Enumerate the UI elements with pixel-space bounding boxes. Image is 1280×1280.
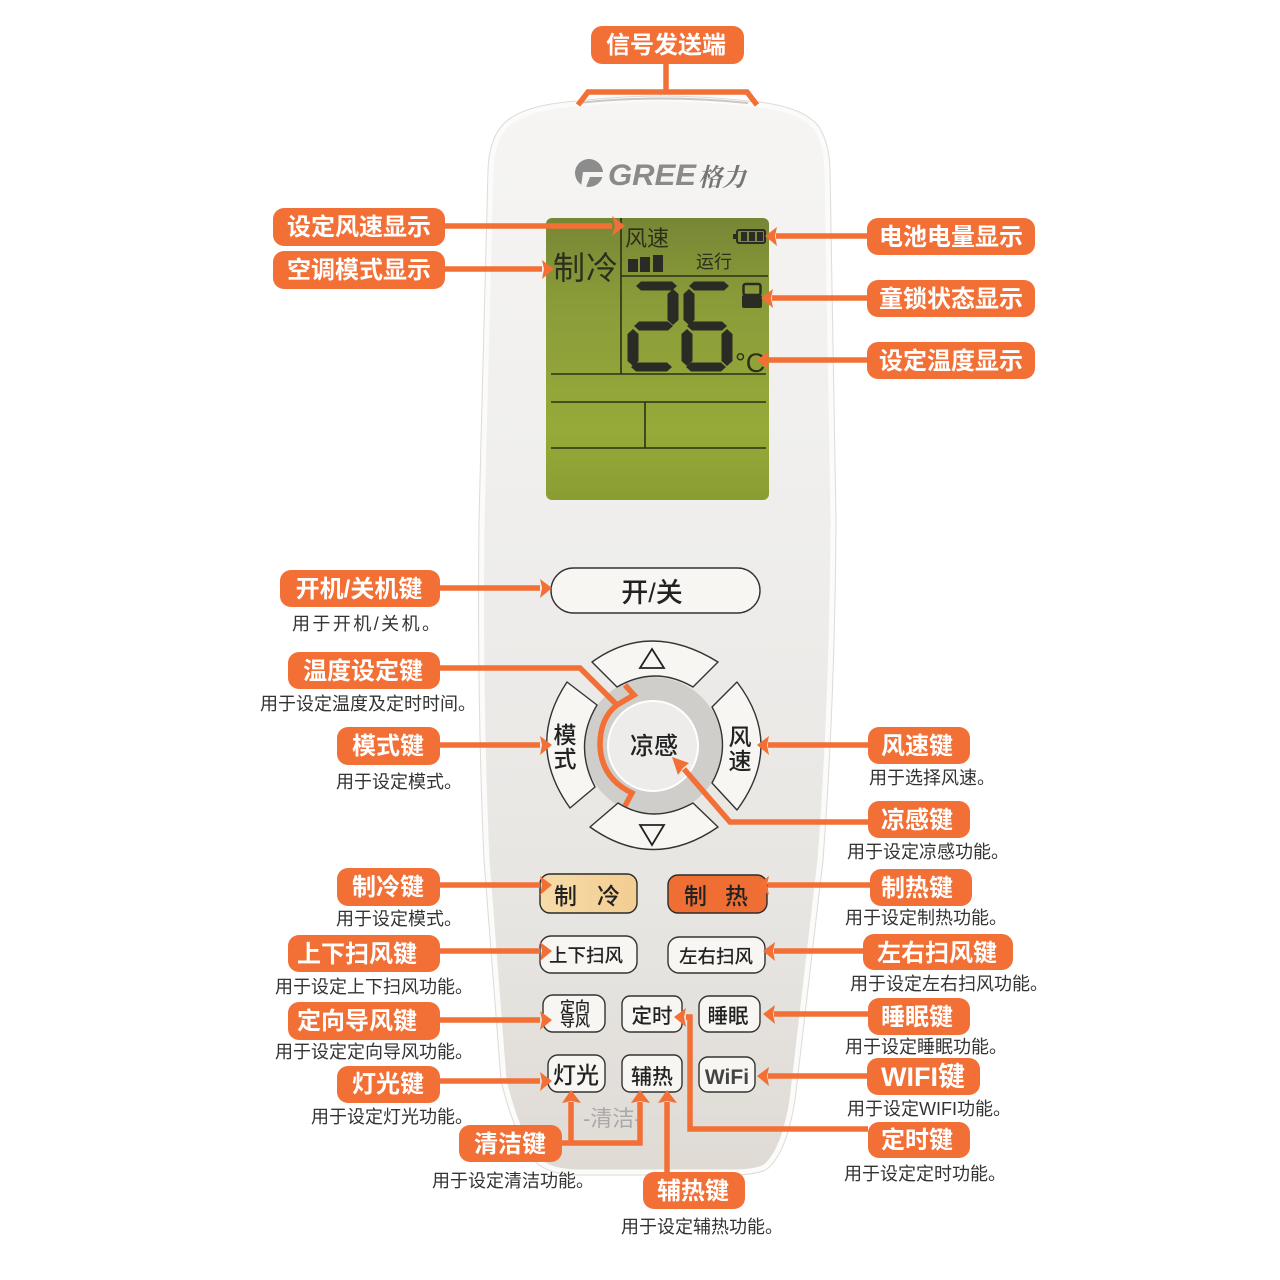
callout: AC mode display: 空调模式显示 [287,257,431,284]
button: up-down swing: 上下扫风 [549,945,623,966]
callout: AC mode display [273,251,445,289]
button: heating: 制 热 [684,883,748,909]
button: WiFi [699,1057,755,1092]
callout: mode key: 用于设定模式。 [336,772,462,792]
button: fan speed [712,682,761,810]
LCD running text: 运行 [696,252,732,272]
callout: mode key [336,727,462,792]
callout: up-down swing key [275,935,473,997]
callout: aux heat key [621,1172,783,1237]
callout: directed air key: 定向导风键 [297,1008,417,1035]
callout: light key: 灯光键 [352,1071,424,1098]
arrow: timer key [674,1008,868,1129]
button: sleep: 睡眠 [708,1005,748,1028]
arrow: sleep key [763,1005,868,1024]
arrow: heating key [757,876,870,895]
callout: child lock display [867,280,1035,317]
callout: WIFI key: WIFI键 [881,1062,965,1092]
callout: aux heat key: 辅热键 [657,1177,729,1205]
arrow: battery [765,227,867,246]
callout: cool feel key: 凉感键 [881,806,953,834]
callout: left-right swing key: 用于设定左右扫风功能。 [850,974,1048,994]
button: down [590,803,718,850]
arrow: mode key [440,736,552,755]
callout: timer key [844,1122,1006,1184]
arrow: mode display [445,260,554,279]
LCD fan speed text: 风速 [625,226,669,251]
button: cooling: 制 冷 [554,883,620,909]
callout: heating key [845,869,1007,928]
callout: clean key: 用于设定清洁功能。 [432,1171,594,1191]
button: mode: 模 [554,722,576,748]
button: light [548,1055,605,1092]
arrow: fan speed display [445,216,625,236]
button: directed air [543,995,605,1032]
callout: temperature key: 温度设定键 [303,658,423,685]
callout: temperature display: 设定温度显示 [879,348,1023,375]
arrow: directed air key [440,1011,552,1030]
arrow: fan key [757,736,868,755]
callout: cooling key: 用于设定模式。 [336,909,462,929]
callout: WIFI key [847,1058,1011,1119]
callout: up-down swing key: 用于设定上下扫风功能。 [275,977,473,997]
LCD temperature 26 [628,282,732,372]
arrow: temperature keys [440,668,634,806]
LCD degree symbol: °C [735,348,765,378]
callout: mode key: 模式键 [352,733,424,760]
callout: child lock display: 童锁状态显示 [879,285,1023,313]
callout: temperature display [867,342,1035,379]
callout: signal emitter [591,26,744,64]
callout: battery display [867,218,1035,255]
button: left-right swing: 左右扫风 [679,946,753,967]
callout: power key: 开机/关机键 [296,576,422,603]
button: directed air: 定向 [560,998,590,1016]
callout: power key [280,570,440,634]
callout: WIFI key: 用于设定WIFI功能。 [847,1099,1011,1119]
callout: cooling key [336,868,462,929]
arrow: cooling key [440,876,552,895]
arrow: up-down swing key [440,942,552,961]
button: heating [668,875,767,913]
callout: aux heat key: 用于设定辅热功能。 [621,1217,783,1237]
button: directed air: 导风 [560,1013,590,1030]
button: cool feel: 凉感 [630,733,678,760]
button: cool feel [608,701,698,791]
LCD child lock icon [742,284,762,308]
signal bracket [578,64,757,105]
callout: power key: 用于开机/关机。 [292,614,440,634]
button: WiFi: WiFi [705,1066,749,1089]
remote control body [482,98,833,1172]
callout: fan speed display: 设定风速显示 [287,214,431,241]
button: up-down swing [540,936,637,973]
arrow: left-right swing key [763,942,863,961]
LCD mode text: 制冷 [553,250,618,286]
button: cooling [540,874,637,913]
logo: GREE: 格力 [698,158,748,194]
LCD fan speed bars [628,255,663,272]
callout: fan speed key: 风速键 [881,733,953,760]
callout: sleep key: 睡眠键 [881,1004,953,1031]
callout: temperature key: 用于设定温度及定时时间。 [260,694,476,714]
arrow: power [440,579,552,598]
arrow: clean key [562,1090,650,1143]
LCD battery icon [733,230,765,243]
callout: temperature key [260,652,476,714]
arrow: light key [440,1072,552,1091]
callout: cool feel key [847,801,1009,862]
callout: heating key: 制热键 [881,875,953,902]
callout: left-right swing key [850,934,1048,994]
callout: light key [311,1066,473,1127]
arrow: child lock [761,289,867,308]
logo: GREE: GREE [608,159,697,192]
button: fan speed: 风 [728,724,752,750]
callout: fan speed display [273,208,445,246]
button: mode: 式 [554,746,576,772]
callout: cooling key: 制冷键 [352,874,424,901]
callout: light key: 用于设定灯光功能。 [311,1107,473,1127]
power button [551,568,760,613]
button: up [592,641,718,687]
callout: cool feel key: 用于设定凉感功能。 [847,842,1009,862]
callout: fan speed key [868,727,995,788]
arrow: aux heat key [658,1090,677,1172]
callout: fan speed key: 用于选择风速。 [869,768,995,788]
callout: heating key: 用于设定制热功能。 [845,908,1007,928]
callout: left-right swing key: 左右扫风键 [877,940,997,967]
button: fan speed: 速 [728,748,752,774]
button: sleep [699,996,760,1032]
callout: clean key [432,1125,594,1191]
button: aux heat [622,1055,682,1092]
power button: 开/关 [621,578,683,608]
button: timer [622,996,682,1032]
callout: clean key: 清洁键 [474,1131,546,1158]
button: mode [547,682,597,808]
callout: sleep key: 用于设定睡眠功能。 [845,1037,1007,1057]
callout: timer key: 定时键 [881,1127,953,1154]
callout: directed air key [275,1002,473,1062]
callout: signal emitter: 信号发送端 [606,32,726,59]
callout: sleep key [845,998,1007,1057]
clean label on remote: -清洁- [583,1106,642,1131]
button: timer: 定时 [632,1005,672,1028]
arrow: cool feel key [672,757,868,822]
LCD display [546,218,769,500]
button: aux heat: 辅热 [631,1066,673,1089]
callout: timer key: 用于设定定时功能。 [844,1164,1006,1184]
callout: up-down swing key: 上下扫风键 [297,941,417,968]
logo: GREE [575,158,748,194]
d-pad ring [584,677,722,815]
callout: directed air key: 用于设定定向导风功能。 [275,1042,473,1062]
button: left-right swing [668,937,765,973]
arrow: WiFi key [757,1067,867,1086]
button: light: 灯光 [553,1062,599,1088]
arrow: temperature [757,351,867,370]
callout: battery display: 电池电量显示 [879,224,1023,251]
